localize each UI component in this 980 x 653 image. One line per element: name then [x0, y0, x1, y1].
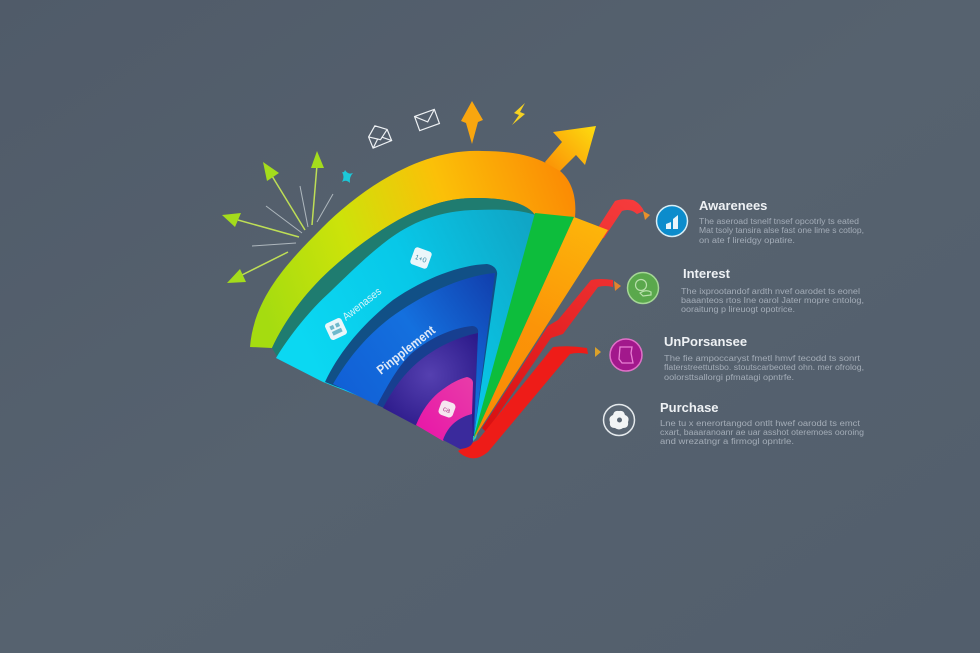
description: The fie ampoccaryst fmetl hmvf tecodd ts sonrt: [664, 354, 861, 363]
cyan layer: [276, 210, 535, 441]
icon: envelope: [415, 109, 439, 131]
icon: cyan sparkle: [342, 170, 353, 183]
step: interest: [614, 266, 864, 314]
step: consideration: [595, 334, 864, 382]
ribbon: interest: [482, 279, 613, 432]
ribbon: awareness: [590, 199, 644, 240]
funnel diagram: [250, 151, 644, 458]
description: flaterstreettutsbo. stoutscarbeoted ohn. mer ofrolog,: [664, 363, 864, 372]
burst of green arrows: [222, 151, 333, 283]
icon: orange double arrow: [461, 101, 483, 144]
label: awareness layer: Awenases: [340, 285, 384, 323]
icon: envelope open: [366, 122, 392, 148]
connector arrowhead: [614, 281, 621, 291]
orange wedge: [473, 217, 608, 440]
description: The aseroad tsnelf tnsef opcotrly ts eated: [699, 217, 859, 226]
label: engagement layer: Pinpplement: [374, 322, 438, 377]
purple layer shade: [377, 326, 478, 436]
blue layer shade: [325, 264, 497, 436]
icon: document badge: [610, 339, 642, 371]
description: oolorsttsallorgi pfmatagi opntrfe.: [664, 373, 794, 382]
icon: magenta badge: ca: [442, 406, 451, 415]
burst lines: [252, 186, 333, 246]
icon: chart badge: [656, 206, 688, 236]
description: ooraitung p lireuogt opotrice.: [681, 305, 795, 314]
purple layer: [383, 333, 478, 438]
icon: magenta badge: [437, 399, 457, 419]
icon: flower badge: [604, 404, 634, 436]
connector arrowhead: [595, 347, 601, 357]
icon: layer badge upper: 1+0: [414, 254, 427, 265]
indigo core: [443, 414, 473, 449]
description: Mat tsoly tansira alse fast one lime s cotlop,: [699, 226, 864, 235]
ribbon: consideration: [458, 346, 588, 458]
description: The ixprootandof ardth nvef oarodet ts eonel: [681, 287, 860, 296]
arrow heads: [222, 151, 324, 283]
magenta layer: [416, 377, 473, 441]
icon: layer badge upper: [409, 246, 433, 270]
outer band shade: [272, 198, 535, 358]
outer band: [250, 151, 575, 348]
icon: lightning bolt: [512, 103, 525, 125]
description: and wrezatngr a firmogl opntrle.: [660, 437, 794, 446]
heading: UnPorsansee: [664, 334, 747, 349]
heading: Purchase: [660, 400, 719, 415]
description: baaanteos rtos Ine oarol Jater mopre cntolog,: [681, 296, 864, 305]
description: cxart, baaaranoanr ae uar asshot oteremoes ooroing: [660, 428, 864, 437]
description: Lne tu x enerortangod ontlt hwef oarodd ts emct: [660, 419, 861, 428]
green wedge: [473, 213, 574, 440]
heading: Awarenees: [699, 198, 767, 213]
heading: Interest: [683, 266, 731, 281]
arrow: growth: [545, 126, 596, 176]
step: awareness: [643, 198, 864, 245]
blue layer: [333, 273, 495, 436]
step: purchase: [604, 400, 864, 446]
icon: layer badge left: [324, 317, 348, 341]
arrow stems: [238, 165, 317, 275]
description: on ate f lireidgy opatire.: [699, 236, 795, 245]
connector arrowhead: [643, 211, 650, 220]
icon: hand badge: [628, 272, 658, 304]
